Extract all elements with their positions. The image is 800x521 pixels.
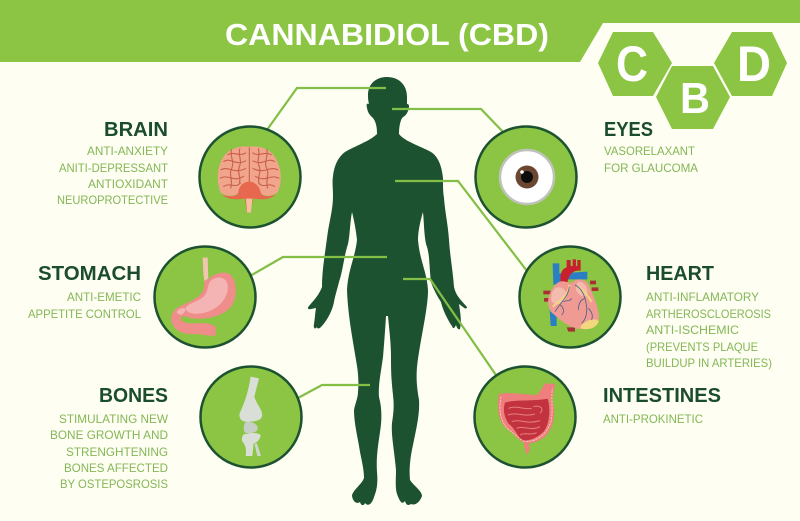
text: eyes: VASORELAXANT bbox=[604, 144, 696, 158]
text: stomach bbox=[28, 263, 141, 321]
text: heart: (PREVENTS PLAQUE bbox=[646, 340, 758, 354]
text: stomach: APPETITE CONTROL bbox=[28, 307, 141, 321]
text: intestines: INTESTINES bbox=[603, 385, 721, 407]
panel: stomach bbox=[154, 246, 256, 348]
panel: heart bbox=[520, 246, 620, 348]
CBD hexagons logo: C bbox=[616, 36, 648, 92]
text: stomach: STOMACH bbox=[38, 263, 141, 285]
text: brain: ANTIOXIDANT bbox=[88, 177, 169, 191]
text: brain: BRAIN bbox=[104, 119, 168, 141]
human body silhouette bbox=[308, 77, 467, 505]
text: heart: HEART bbox=[646, 263, 714, 285]
text: intestines bbox=[603, 385, 721, 426]
text: heart bbox=[646, 263, 772, 370]
text: bones: BY OSTEPOSROSIS bbox=[60, 477, 168, 491]
CBD hexagons logo: B bbox=[680, 74, 710, 123]
text: stomach: ANTI-EMETIC bbox=[67, 290, 141, 304]
text: eyes: FOR GLAUCOMA bbox=[604, 161, 698, 175]
panel: bones bbox=[200, 366, 302, 468]
icon: heart bbox=[543, 259, 599, 332]
text: eyes bbox=[604, 119, 698, 175]
panel: intestines bbox=[474, 366, 576, 468]
text: bones bbox=[50, 385, 169, 491]
icon: stomach bbox=[171, 258, 236, 336]
icon: knee bones bbox=[239, 377, 262, 456]
panel: brain bbox=[200, 126, 300, 228]
text: heart: ARTHEROSCLOEROSIS bbox=[646, 307, 771, 321]
text: eyes: EYES bbox=[604, 119, 653, 141]
title: CANNABIDIOL (CBD) bbox=[225, 17, 549, 52]
text: heart: ANTI-ISCHEMIC bbox=[646, 323, 739, 337]
text: heart: BUILDUP IN ARTERIES) bbox=[646, 356, 772, 370]
text: brain: ANTI-ANXIETY bbox=[87, 144, 168, 158]
icon: intestines bbox=[498, 383, 555, 455]
text: heart: ANTI-INFLAMATORY bbox=[646, 290, 759, 304]
CBD hexagons logo bbox=[598, 32, 787, 129]
text: bones: BONES bbox=[99, 385, 168, 407]
text: bones: STRENGHTENING bbox=[66, 445, 168, 459]
text: bones: BONE GROWTH AND bbox=[50, 428, 168, 442]
icon: brain bbox=[218, 146, 281, 213]
CBD hexagons logo: D bbox=[737, 36, 771, 92]
text: bones: STIMULATING NEW bbox=[59, 412, 169, 426]
icon: eyeball bbox=[500, 150, 554, 204]
header banner bbox=[0, 0, 800, 62]
text: bones: BONES AFFECTED bbox=[64, 461, 168, 475]
panel: eyes bbox=[476, 126, 576, 228]
text: brain: NEUROPROTECTIVE bbox=[57, 193, 168, 207]
text: brain bbox=[57, 119, 169, 207]
text: intestines: ANTI-PROKINETIC bbox=[603, 412, 703, 426]
connector lines bbox=[250, 88, 527, 398]
text: brain: ANITI-DEPRESSANT bbox=[59, 161, 169, 175]
